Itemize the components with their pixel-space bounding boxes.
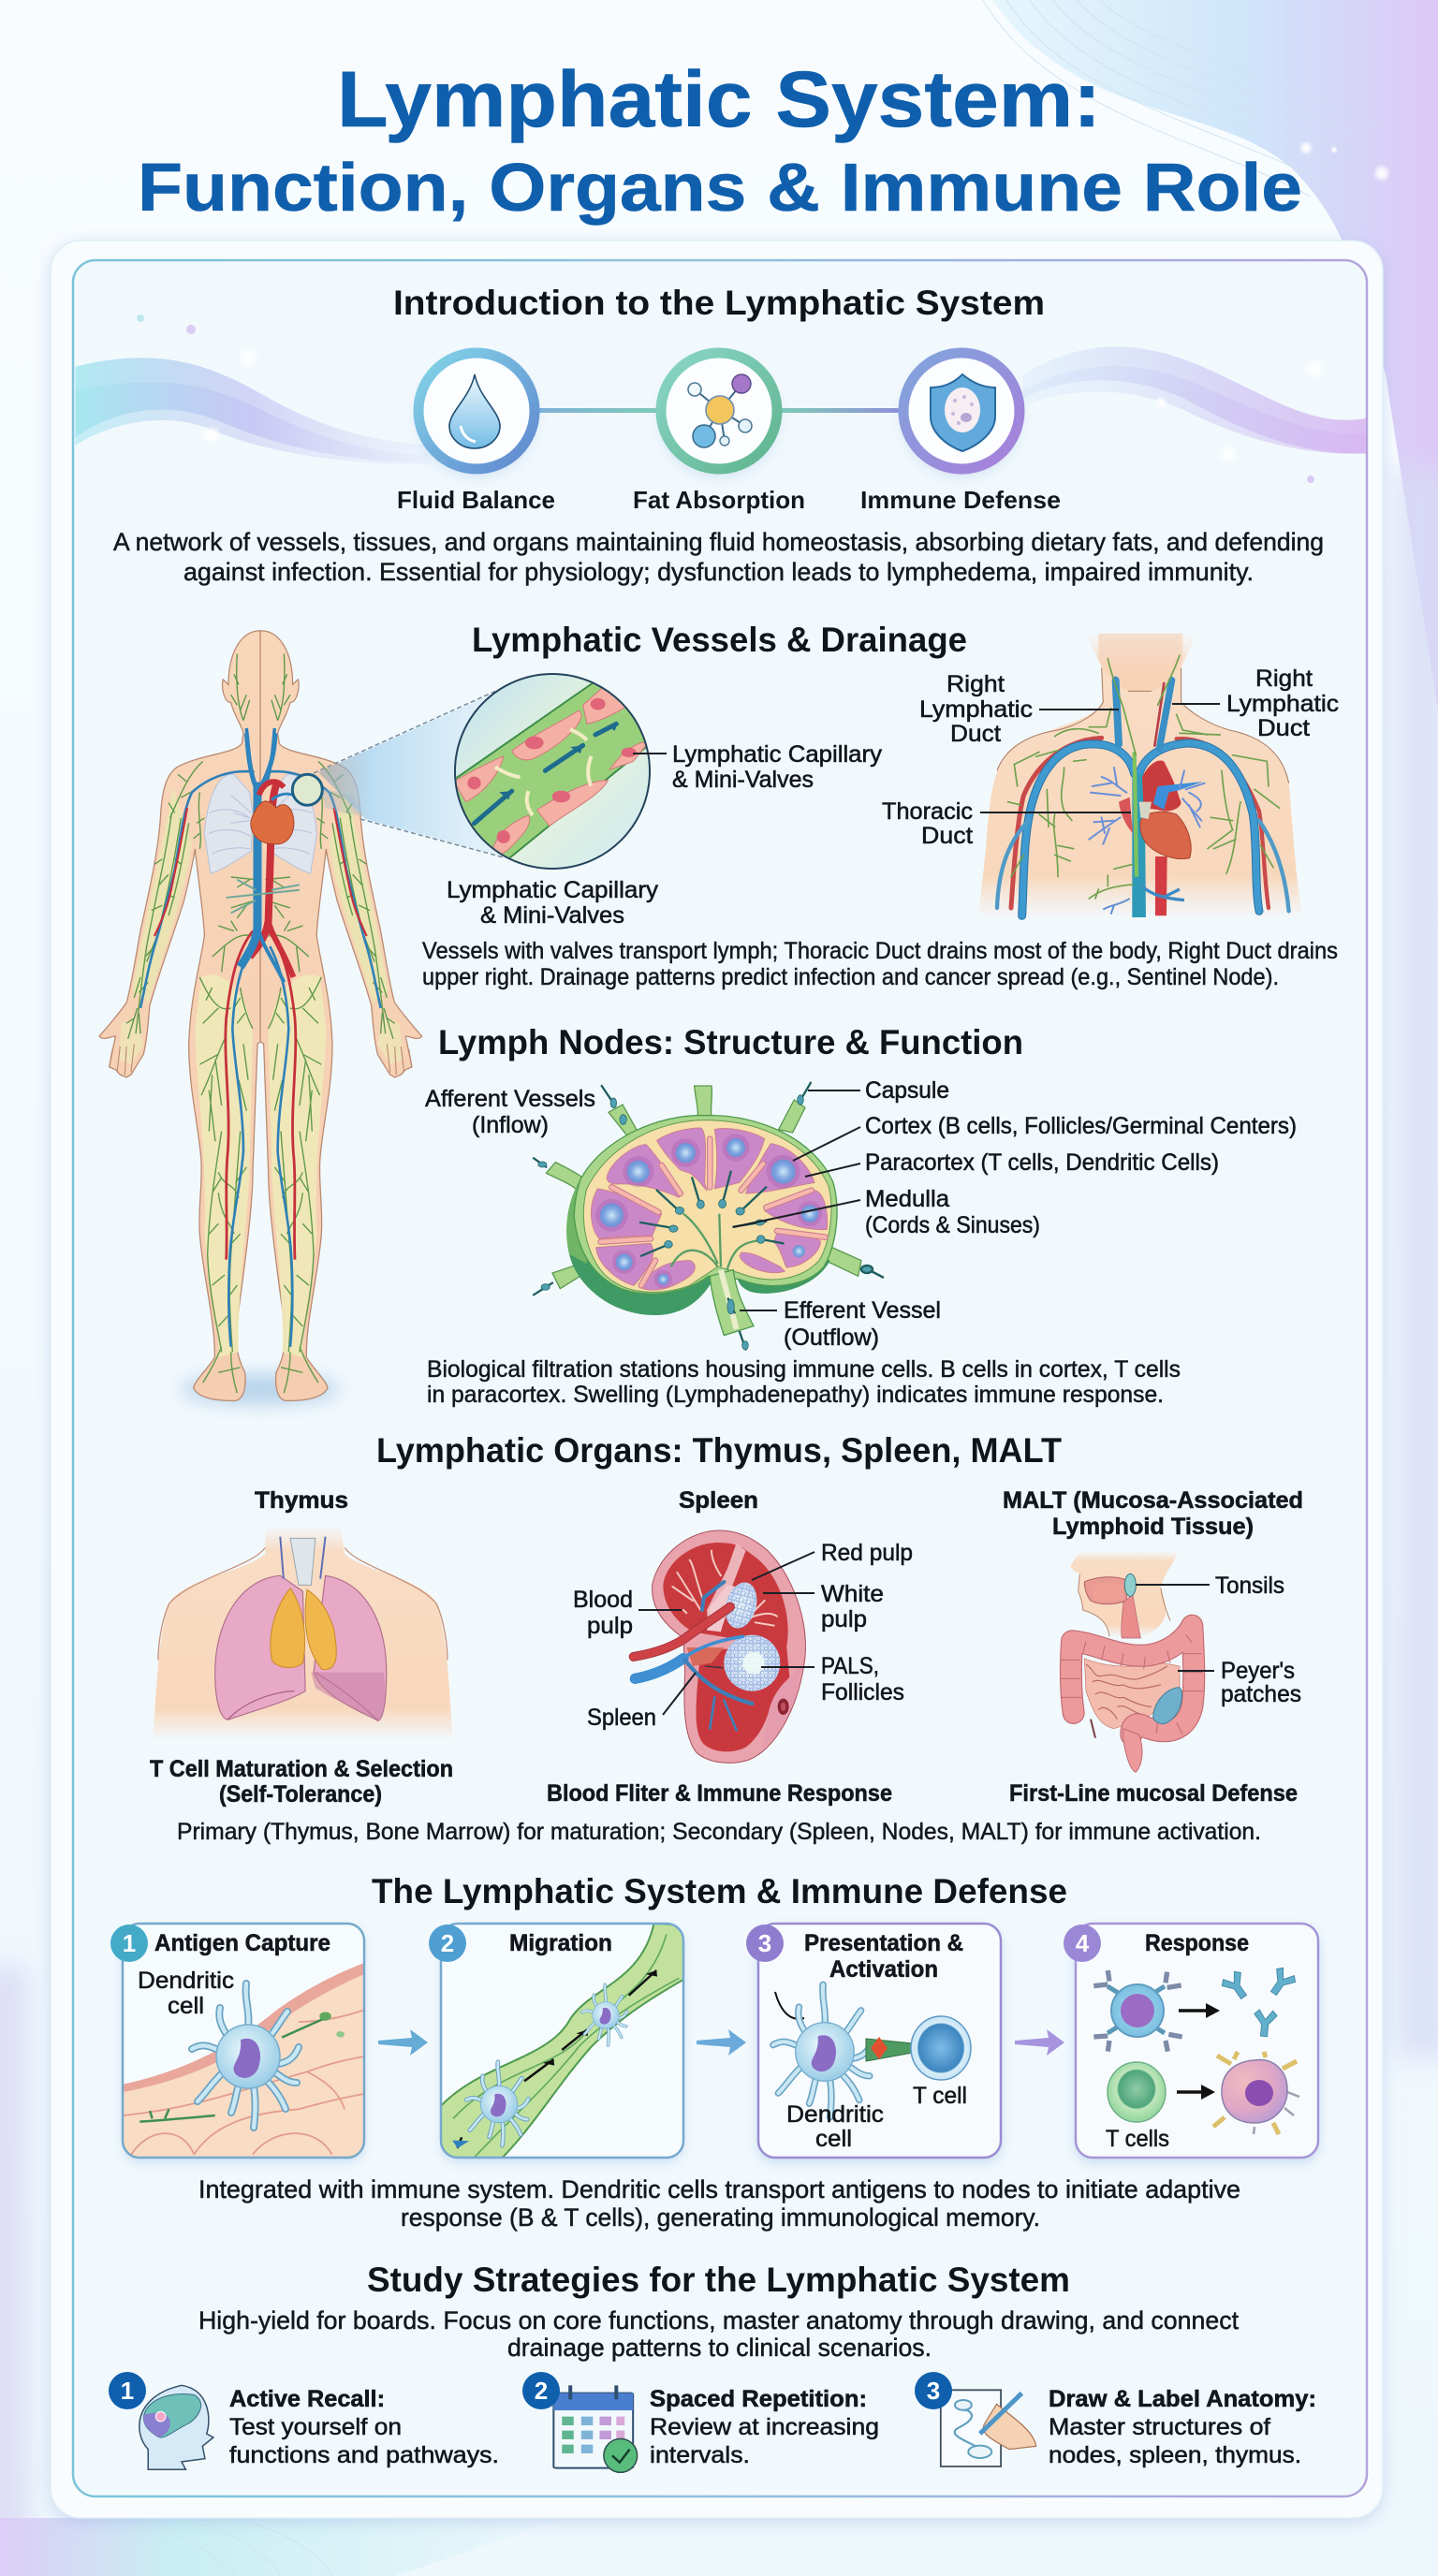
heading: study strategies: Study Strategies for the Lymphatic System <box>367 2261 1070 2299</box>
label: right lymphatic duct (left): Right <box>946 671 1005 697</box>
strategy 1: active recall: functions and pathways. <box>229 2442 499 2468</box>
heading: lymph nodes: Lymph Nodes: Structure & Function <box>438 1023 1023 1061</box>
spleen labels: Follicles <box>821 1679 904 1705</box>
MALT labels: Tonsils <box>1215 1573 1284 1599</box>
label: lymphatic capillary (right) <box>633 741 883 793</box>
panel 1: antigen capture <box>110 1924 365 2158</box>
arrow <box>1015 2029 1064 2056</box>
arrow <box>378 2029 428 2056</box>
icon: immune defense shield <box>900 351 1023 475</box>
magnifier cone <box>314 691 504 857</box>
panel 3: presentation and activation: Activation <box>829 1956 938 1983</box>
organ captions <box>150 1756 1298 1808</box>
spleen labels: Red pulp <box>821 1540 913 1566</box>
figure: thymus in chest <box>153 1526 453 1741</box>
icon: fat absorption molecule <box>657 351 781 475</box>
label: lymphatic capillary (below): Lymphatic Capillary <box>447 877 659 903</box>
label: thoracic duct <box>882 798 1131 849</box>
organ titles <box>255 1487 1303 1540</box>
spleen labels: Blood <box>573 1587 633 1613</box>
MALT labels: Peyer's <box>1221 1658 1295 1684</box>
strategy 3: draw and label anatomy: nodes, spleen, thymus. <box>1049 2442 1301 2468</box>
panel 3: presentation and activation: T cell <box>913 2083 967 2109</box>
immune paragraph <box>198 2175 1240 2232</box>
label: cortex <box>793 1113 1297 1161</box>
strategy 3: draw and label anatomy: Master structures of <box>1049 2414 1270 2440</box>
spleen labels: pulp <box>821 1606 867 1632</box>
intro pillar labels <box>397 486 1061 514</box>
title <box>138 55 1302 226</box>
panel 1: antigen capture: 1 <box>123 1929 136 1957</box>
heading: vessels: Lymphatic Vessels & Drainage <box>472 621 967 659</box>
spleen labels <box>573 1540 913 1731</box>
strategy 1: active recall: Test yourself on <box>229 2414 402 2440</box>
label: efferent vessel: (Outflow) <box>784 1325 879 1351</box>
strategy 3: draw and label anatomy: 3 <box>927 2377 940 2405</box>
label: thoracic duct: Thoracic <box>882 798 973 825</box>
figure: chest with ducts <box>978 634 1303 919</box>
intro pillar labels: Immune Defense <box>860 486 1061 514</box>
label: right lymphatic duct (right): Right <box>1255 666 1313 692</box>
immune paragraph: response (B & T cells), generating immunological memory. <box>401 2203 1040 2232</box>
label: right lymphatic duct (left): Duct <box>950 721 1001 747</box>
organ titles: Thymus <box>255 1487 348 1514</box>
organ captions: Blood Fliter & Immune Response <box>547 1780 892 1807</box>
vessels paragraph <box>422 938 1338 990</box>
intro paragraph: against infection. Essential for physiology; dysfunction leads to lymphedema, impaired immunity. <box>183 558 1254 586</box>
label: lymphatic capillary (below): & Mini-Valves <box>480 902 624 929</box>
intro pillar labels: Fluid Balance <box>397 486 555 514</box>
label: right lymphatic duct (right): Lymphatic <box>1226 691 1339 717</box>
strategy 1: active recall <box>109 2372 499 2469</box>
label: afferent vessels <box>425 1086 595 1138</box>
heading: introduction: Introduction to the Lymphatic System <box>393 284 1045 322</box>
panel 4: response: T cells <box>1106 2126 1169 2152</box>
panel 1: antigen capture: Antigen Capture <box>154 1930 330 1956</box>
MALT labels <box>1136 1573 1301 1707</box>
panel 1: antigen capture: Dendritic <box>138 1968 234 1994</box>
strategy 2: spaced repetition: 2 <box>535 2377 548 2405</box>
immune paragraph: Integrated with immune system. Dendritic cells transport antigens to nodes to initiate adaptive <box>198 2175 1240 2203</box>
vessels paragraph: Vessels with valves transport lymph; Thoracic Duct drains most of the body, Right Duct drains <box>422 938 1338 964</box>
label: right lymphatic duct (left): Lymphatic <box>919 696 1033 723</box>
label: afferent vessels: Afferent Vessels <box>425 1086 595 1112</box>
title: Function, Organs & Immune Role <box>138 151 1302 226</box>
label: lymphatic capillary (below) <box>447 877 659 929</box>
panel 2: migration: 2 <box>441 1929 454 1957</box>
label: lymphatic capillary (right): & Mini-Valves <box>672 767 814 793</box>
arrow <box>697 2029 746 2056</box>
strategy 2: spaced repetition: intervals. <box>650 2442 750 2468</box>
panel 2: migration <box>429 1924 692 2160</box>
spleen labels: White <box>821 1581 884 1607</box>
study intro paragraph <box>198 2306 1239 2362</box>
panel 4: response <box>1064 1924 1318 2158</box>
figure: full body lymphatic system <box>99 631 422 1404</box>
label: right lymphatic duct (right): Duct <box>1257 715 1310 741</box>
panel 3: presentation and activation: cell <box>815 2126 852 2152</box>
panel 1: antigen capture: cell <box>168 1993 204 2019</box>
organ titles: Lymphoid Tissue) <box>1052 1514 1254 1540</box>
label: afferent vessels: (Inflow) <box>472 1112 549 1138</box>
label: medulla: Medulla <box>865 1186 949 1212</box>
label: efferent vessel: Efferent Vessel <box>784 1297 941 1324</box>
panel 3: presentation and activation <box>746 1924 1001 2158</box>
MALT labels: patches <box>1221 1681 1301 1707</box>
spleen labels: PALS, <box>821 1653 879 1679</box>
strategy 1: active recall: 1 <box>121 2377 134 2405</box>
label: medulla: (Cords & Sinuses) <box>865 1212 1040 1238</box>
organ captions: T Cell Maturation & Selection <box>150 1756 453 1782</box>
organ captions: (Self-Tolerance) <box>219 1781 382 1808</box>
spleen labels: Spleen <box>587 1705 656 1731</box>
label: lymphatic capillary (right): Lymphatic Capillary <box>672 741 883 768</box>
vessels paragraph: upper right. Drainage patterns predict infection and cancer spread (e.g., Sentinel Node). <box>422 964 1279 990</box>
panel 3: presentation and activation: Dendritic <box>786 2101 884 2128</box>
organs paragraph: Primary (Thymus, Bone Marrow) for maturation; Secondary (Spleen, Nodes, MALT) for immune activation. <box>177 1819 1261 1845</box>
label: capsule: Capsule <box>865 1077 949 1104</box>
label: right lymphatic duct (left) <box>919 671 1119 747</box>
panel 3: presentation and activation: 3 <box>758 1929 771 1957</box>
panel 2: migration: Migration <box>509 1930 612 1956</box>
icon: fluid balance water drop <box>415 351 538 475</box>
study intro paragraph: drainage patterns to clinical scenarios. <box>507 2334 932 2362</box>
organ captions: First-Line mucosal Defense <box>1009 1780 1298 1807</box>
lymph nodes paragraph: in paracortex. Swelling (Lymphadenepathy) indicates immune response. <box>427 1382 1164 1408</box>
title: Lymphatic System: <box>337 55 1101 143</box>
panel 3: presentation and activation: Presentation & <box>804 1930 963 1956</box>
figure: lymph node cross-section <box>534 1083 884 1350</box>
organ titles: MALT (Mucosa-Associated <box>1003 1487 1303 1514</box>
strategy 2: spaced repetition: Spaced Repetition: <box>650 2386 867 2412</box>
intro paragraph: A network of vessels, tissues, and organs maintaining fluid homeostasis, absorbing dietary fats, and defending <box>113 528 1324 556</box>
strategy 1: active recall: Active Recall: <box>229 2386 385 2412</box>
connector lines <box>538 408 903 413</box>
label: paracortex: Paracortex (T cells, Dendritic Cells) <box>865 1149 1219 1176</box>
magnifier: lymphatic capillary with mini valves <box>449 674 658 869</box>
panel 4: response: Response <box>1145 1930 1249 1956</box>
heading: immune defense: The Lymphatic System & Immune Defense <box>372 1872 1067 1910</box>
inner card <box>73 260 1367 2496</box>
lymph nodes paragraph: Biological filtration stations housing immune cells. B cells in cortex, T cells <box>427 1356 1181 1383</box>
figure: MALT head and intestines <box>1061 1551 1203 1772</box>
label: efferent vessel <box>740 1297 941 1351</box>
figure: spleen <box>634 1530 805 1763</box>
decorative waves <box>75 346 1369 465</box>
strategy 3: draw and label anatomy <box>915 2372 1316 2468</box>
strategy 3: draw and label anatomy: Draw & Label Anatomy: <box>1049 2386 1316 2412</box>
heading: organs: Lymphatic Organs: Thymus, Spleen, MALT <box>376 1431 1062 1470</box>
label: right lymphatic duct (right) <box>1172 666 1339 741</box>
lymph nodes paragraph <box>427 1356 1181 1408</box>
spleen labels: pulp <box>587 1613 633 1639</box>
label: cortex: Cortex (B cells, Follicles/Germinal Centers) <box>865 1113 1297 1139</box>
strategy 2: spaced repetition <box>522 2372 879 2472</box>
label: thoracic duct: Duct <box>921 823 973 849</box>
study intro paragraph: High-yield for boards. Focus on core functions, master anatomy through drawing, and connect <box>198 2306 1239 2334</box>
panel 4: response: 4 <box>1076 1929 1090 1957</box>
intro paragraph <box>113 528 1324 586</box>
strategy 2: spaced repetition: Review at increasing <box>650 2414 879 2440</box>
label: medulla <box>733 1186 1040 1238</box>
intro pillar labels: Fat Absorption <box>633 486 805 514</box>
organ titles: Spleen <box>679 1487 758 1514</box>
